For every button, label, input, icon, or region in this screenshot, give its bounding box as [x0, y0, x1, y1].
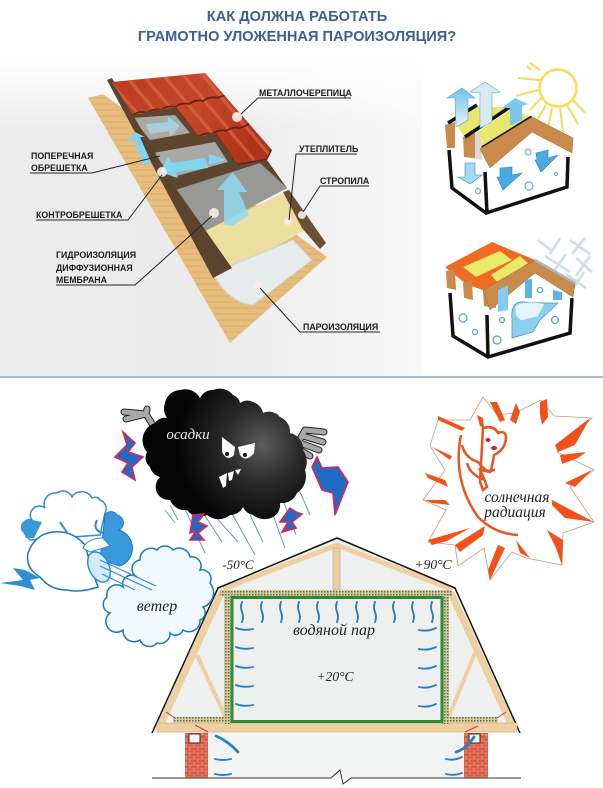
wind cloud — [103, 546, 214, 647]
down arrows — [458, 163, 482, 184]
right roof board — [480, 117, 573, 168]
red metal tiles — [112, 73, 272, 165]
wind tail bolt — [0, 568, 40, 590]
left wood blocks — [445, 122, 455, 148]
mauerlat — [189, 734, 200, 743]
body cheek — [28, 532, 98, 591]
blue arrows — [127, 132, 151, 165]
wind character — [0, 491, 214, 647]
blue face — [100, 512, 132, 566]
sun face curve — [459, 435, 518, 535]
yellow insulation — [463, 251, 512, 277]
label: контробрешетка — [36, 175, 162, 220]
wind label: ветер — [137, 598, 177, 615]
title: ГРАМОТНО УЛОЖЕННАЯ ПАРОИЗОЛЯЦИЯ? — [138, 29, 456, 45]
dark underlay — [112, 82, 287, 232]
up arrows — [447, 88, 475, 127]
title — [138, 9, 456, 45]
rain — [165, 485, 310, 555]
label: металлочерепица — [241, 88, 353, 114]
floor line — [152, 770, 521, 784]
black strips — [448, 105, 532, 148]
lower cavity — [153, 142, 228, 177]
insulation — [455, 107, 510, 138]
left arm — [124, 409, 156, 430]
vapour label: водяной пар — [293, 622, 375, 639]
orange rays — [425, 399, 594, 580]
wood sheathing — [88, 94, 327, 343]
blue insets — [498, 285, 508, 312]
cold outside temperature: -50°C — [222, 557, 254, 572]
right rafter — [283, 190, 326, 249]
star body — [423, 397, 594, 580]
roof cutaway illustration — [88, 65, 327, 343]
walls — [450, 293, 572, 357]
solar radiation label: солнечная — [484, 489, 550, 506]
sun — [516, 63, 585, 132]
mouth and blast — [83, 548, 115, 586]
interior fill — [152, 538, 520, 733]
vapour barrier — [213, 240, 312, 305]
panel: roof layers background — [0, 60, 603, 378]
label: гидроизоляция: ГИДРОИЗОЛЯЦИЯ — [56, 250, 136, 260]
label: поперечная обрешетка: ПОПЕРЕЧНАЯ — [31, 151, 93, 161]
upper cavity — [132, 115, 190, 140]
upper rafters — [223, 545, 451, 589]
lower rafters — [161, 593, 511, 724]
roof outline — [152, 538, 520, 733]
orange top — [445, 242, 535, 292]
label: пароизоляция: ПАРОИЗОЛЯЦИЯ — [303, 322, 378, 332]
label: стропила: СТРОПИЛА — [320, 176, 370, 186]
label: контробрешетка: КОНТРОБРЕШЕТКА — [36, 210, 123, 220]
eyes — [60, 520, 103, 534]
lightning bolts — [115, 432, 348, 540]
left rafter — [107, 78, 232, 278]
right arm — [293, 430, 324, 456]
insulated ceiling and walls — [220, 590, 452, 596]
sun character: радиация — [483, 504, 546, 521]
membrane — [175, 163, 287, 232]
main beam — [157, 723, 517, 732]
precipitation label: осадки — [166, 427, 210, 443]
hot outside temperature: +90°C — [414, 557, 453, 572]
snowflakes — [538, 238, 592, 290]
title: КАК ДОЛЖНА РАБОТАТЬ — [207, 9, 387, 25]
label: гидроизоляция: ДИФФУЗИОННАЯ — [56, 263, 133, 273]
callout dots — [232, 112, 242, 122]
face — [219, 437, 255, 488]
king post — [333, 548, 340, 590]
label: пароизоляция — [260, 288, 380, 332]
label: гидроизоляция: МЕМБРАНА — [56, 275, 108, 285]
sun character — [423, 397, 594, 580]
droplets — [459, 288, 558, 344]
hair — [22, 491, 106, 540]
cloud body — [143, 389, 307, 519]
mansard house section — [152, 538, 521, 784]
walls — [449, 150, 568, 213]
inside temperature: +20°C — [316, 669, 355, 684]
brick walls — [185, 733, 208, 778]
storm cloud character — [115, 389, 348, 555]
vapour barrier sheet — [512, 302, 558, 338]
house icon: winter with snow — [445, 238, 592, 357]
label: поперечная обрешетка: ОБРЕШЕТКА — [31, 163, 88, 173]
label: утеплитель — [289, 144, 359, 220]
label: стропила — [303, 176, 370, 212]
house icon: summer with sun — [445, 63, 585, 213]
insulation — [203, 192, 305, 273]
label: металлочерепица: МЕТАЛЛОЧЕРЕПИЦА — [259, 88, 353, 98]
green vapour barrier frame — [232, 598, 442, 722]
wood blocks — [446, 269, 456, 290]
label: утеплитель: УТЕПЛИТЕЛЬ — [299, 144, 359, 154]
droplets — [476, 149, 558, 194]
label: гидроизоляция — [56, 216, 212, 285]
label: поперечная обрешетка — [30, 151, 160, 173]
water vapour squiggles — [215, 602, 474, 775]
